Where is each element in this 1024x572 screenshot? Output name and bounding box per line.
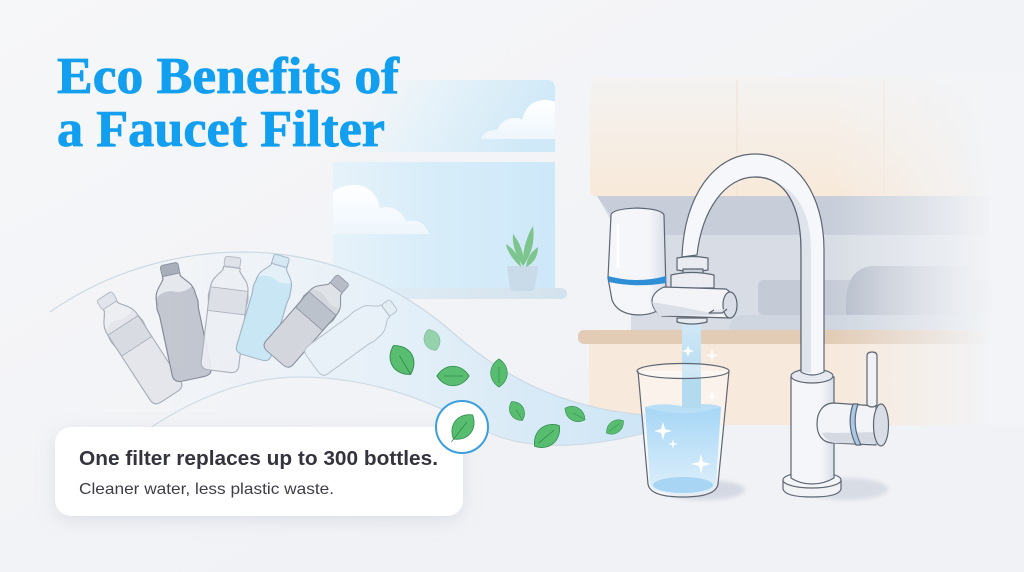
right fade (830, 70, 1024, 430)
bottle 3 (199, 255, 253, 374)
leaf 3 (437, 366, 469, 386)
window sill (340, 288, 567, 299)
glass shadow (665, 480, 745, 500)
faucet shadow (808, 478, 888, 500)
potted plant (506, 226, 538, 291)
counter edge and lower cabinet (578, 330, 990, 426)
nozzle (677, 318, 707, 324)
leaf 8 (603, 416, 627, 438)
adapter body (652, 287, 737, 318)
water stream (682, 324, 701, 408)
faucet filter attachment (608, 208, 737, 324)
kitchen background (560, 70, 1024, 572)
lever (867, 352, 877, 407)
lower window pane (333, 162, 555, 290)
card heading: One filter replaces up to 300 bottles. (79, 448, 438, 470)
gooseneck spout (682, 154, 824, 375)
sparkles (654, 349, 718, 474)
callout card (55, 427, 463, 516)
cloud upper (481, 100, 555, 139)
handle (817, 403, 888, 446)
adapter nut (671, 272, 714, 288)
faucet body (791, 377, 834, 484)
plastic bottles (88, 251, 404, 407)
leaf 6 (562, 402, 588, 426)
base plate (783, 472, 841, 497)
title (57, 48, 400, 158)
leaf 1 (384, 340, 420, 380)
leaf 2 pale (421, 327, 443, 353)
leaf 4 (491, 359, 507, 387)
bottle 6 (302, 290, 404, 378)
collar (791, 369, 833, 383)
icon: leaf badge (436, 401, 488, 453)
countertop (560, 425, 1024, 572)
bottle 4 (234, 251, 300, 363)
faucet (682, 154, 888, 497)
connector neck (683, 269, 703, 275)
card subtext: Cleaner water, less plastic waste. (79, 481, 334, 498)
leaf 5 (505, 398, 529, 424)
window (333, 80, 567, 299)
water in glass (645, 407, 721, 494)
bottle 1 (88, 286, 185, 407)
cloud lower (333, 185, 429, 234)
upper window pane (345, 80, 555, 152)
cabinets (590, 78, 990, 196)
backsplash and appliances (597, 196, 990, 330)
title: a Faucet Filter (57, 101, 385, 158)
connector collar (677, 256, 708, 272)
spout inner shading (755, 177, 811, 373)
flow swoosh band (50, 252, 645, 445)
leaf 7 (528, 418, 566, 454)
bottle 5 (261, 267, 358, 370)
filter canister (608, 208, 666, 315)
green leaves (384, 327, 627, 454)
drinking glass (637, 349, 729, 497)
bottle 2 (148, 260, 214, 383)
title: Eco Benefits of (57, 48, 400, 105)
